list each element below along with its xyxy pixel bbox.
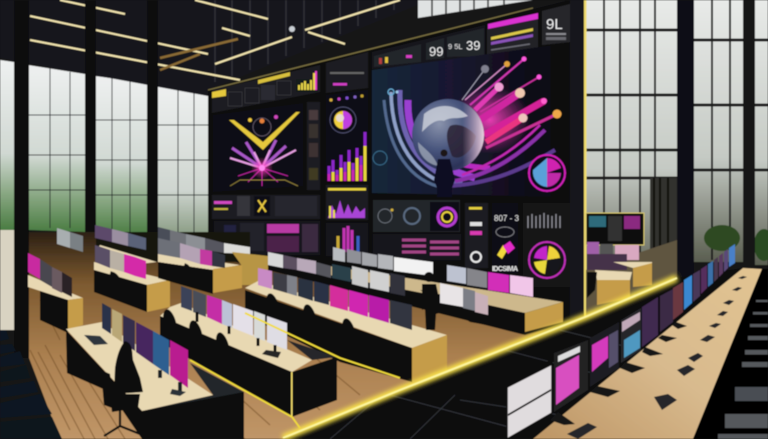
ceiling with light strips [0, 0, 430, 96]
left wall panel: top widgets [212, 65, 320, 113]
swoosh bands [384, 90, 555, 188]
stat number 39: 39 [466, 38, 480, 53]
pie chart [529, 155, 565, 191]
person silhouette viewing the wall [434, 150, 455, 197]
left wall panel: lower widgets [212, 195, 320, 255]
floor behind yellow line (right) [586, 213, 677, 317]
tile with pie gauge [523, 203, 570, 287]
chairs desk 2 [161, 308, 244, 369]
main screen: earth and swoosh artwork [372, 43, 569, 197]
standing person in aisle [422, 272, 442, 330]
monitors [102, 303, 188, 396]
left black stairs [0, 330, 62, 439]
desk group: back left [94, 245, 170, 312]
tall strip widget [465, 203, 488, 268]
pink glow behind planet [450, 86, 530, 154]
centre column: area chart panels [326, 185, 368, 256]
main video wall [208, 0, 586, 335]
monitors desk 2 [181, 286, 287, 358]
monitor row C [258, 268, 488, 330]
left wall panel: side strip [307, 102, 320, 190]
monitor row on long desk [507, 244, 735, 439]
chairs at centre rows [264, 292, 369, 351]
monitor row B [316, 262, 533, 297]
right windows [585, 0, 768, 280]
black tiled floor [283, 268, 743, 439]
operator and chair [101, 341, 143, 436]
top right legend widget [487, 13, 538, 56]
columns [14, 0, 755, 358]
keypads on long desk [567, 276, 747, 439]
black right stairs [693, 269, 768, 439]
stat number 951: 9 5L [448, 42, 463, 51]
back left monitors and desks [57, 225, 268, 285]
centre column: widget and donut chart [326, 52, 368, 182]
left windows [0, 60, 208, 235]
tile with ring and IDCSIMA label [492, 203, 519, 273]
left wall panel: radial yellow V artwork [213, 103, 303, 192]
plants [704, 225, 768, 261]
earth globe [412, 99, 484, 171]
tile label: IDCSIMA [492, 266, 518, 273]
glowing data nodes [373, 56, 562, 165]
desk 2 [160, 286, 337, 417]
wall row: bottom widgets under main screen [373, 200, 461, 260]
long wooden desk [533, 268, 762, 439]
stat number 99: 99 [429, 44, 443, 59]
wooden floor [0, 230, 620, 439]
monitor row A [268, 247, 433, 276]
main screen: top stat widgets [372, 25, 485, 69]
desk group: left [28, 253, 83, 333]
front desk with seated operator [66, 303, 244, 439]
number readout: 807 - 3 [494, 214, 519, 223]
upper glazing above wall [418, 0, 533, 18]
top right number tile [542, 4, 570, 45]
desk group: middle back [158, 238, 242, 294]
centre column: bar chart [329, 132, 365, 181]
desk group: centre right rows [245, 247, 563, 382]
comet rays [462, 59, 557, 148]
tile number 9L: 9L [546, 16, 563, 33]
yellow glow floor line [190, 278, 677, 438]
